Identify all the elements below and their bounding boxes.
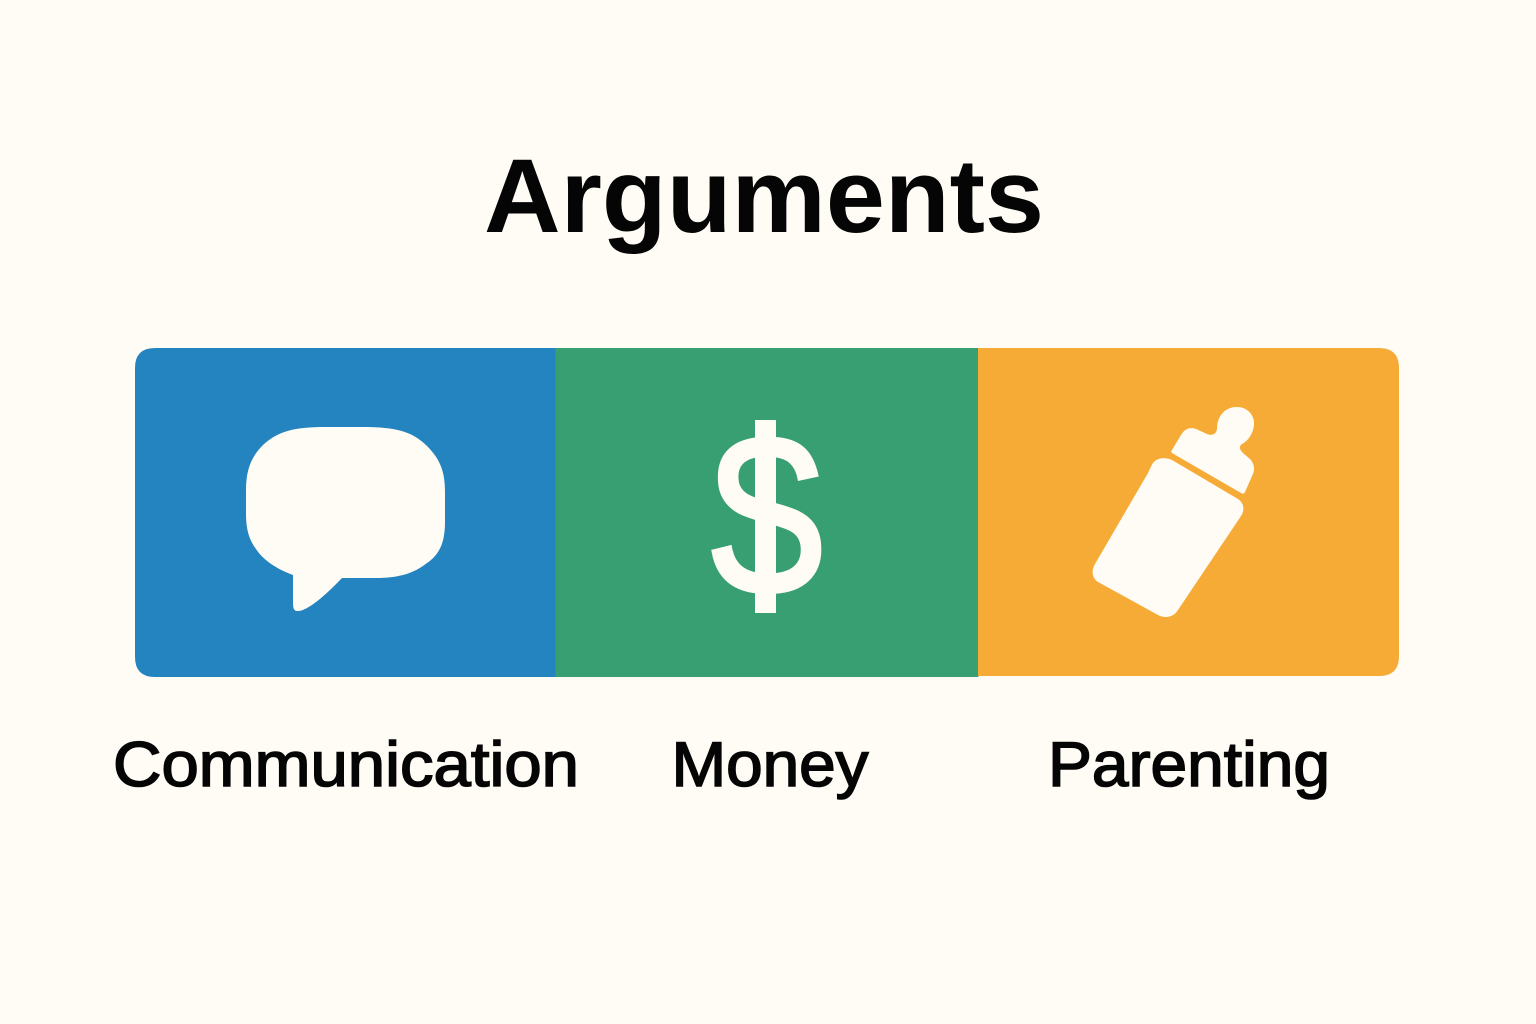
- icon: dollar sign: $: [711, 386, 823, 643]
- panel: parenting: [978, 348, 1399, 676]
- label: money: Money: [672, 730, 869, 800]
- icon: speech bubble: [246, 427, 445, 611]
- label: communication: Communication: [113, 730, 579, 800]
- panel: money: [556, 348, 978, 677]
- bottle body: [1093, 458, 1243, 617]
- title: Arguments: [484, 138, 1044, 255]
- panel: communication: [135, 348, 556, 677]
- icon: baby bottle: [1093, 407, 1254, 617]
- bottle nipple and collar: [1171, 407, 1254, 494]
- panel: three-colour band: [135, 348, 1399, 677]
- label: parenting: Parenting: [1048, 730, 1330, 800]
